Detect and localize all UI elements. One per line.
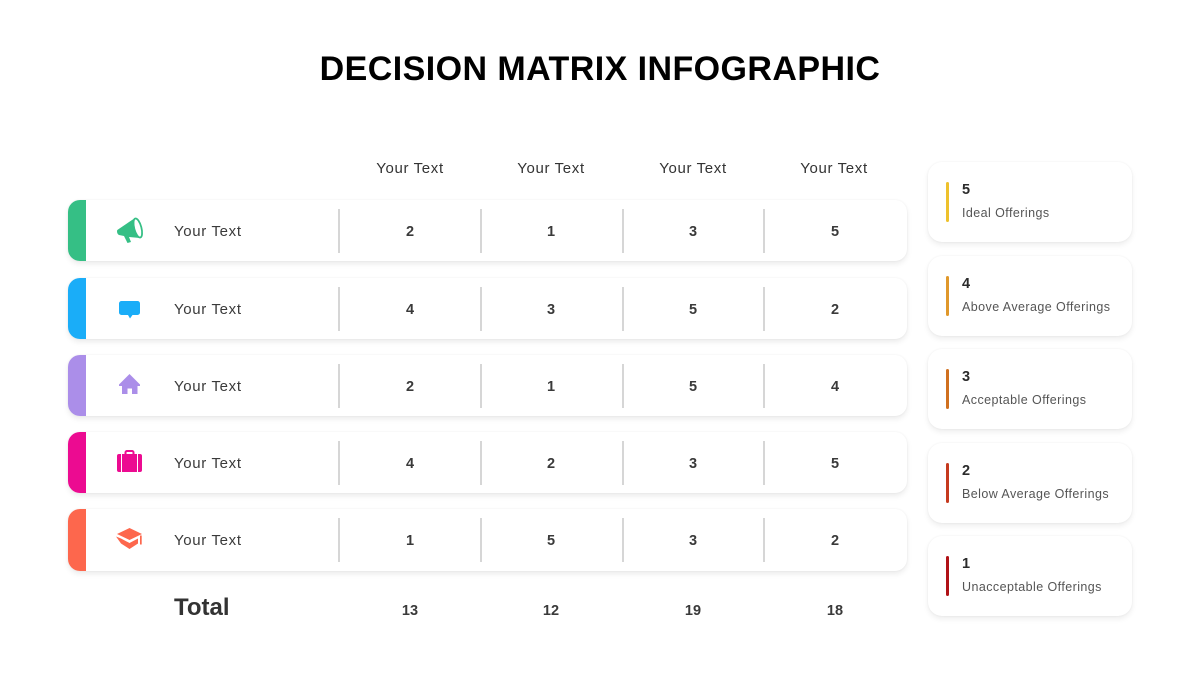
row 4: magenta (68, 432, 907, 493)
value: 5 (547, 533, 555, 549)
row label: Your Text (174, 532, 242, 549)
value: 3 (547, 302, 555, 318)
column heading 3: Your Text (659, 160, 727, 177)
colour bar (946, 182, 949, 222)
total 4: 18 (827, 603, 843, 619)
total 1: 13 (402, 603, 418, 619)
legend card: 5 (928, 162, 1132, 242)
value: 3 (689, 533, 697, 549)
colour bar (946, 276, 949, 316)
legend card: 4 (928, 256, 1132, 336)
row 1: green (68, 200, 907, 261)
row label: Your Text (174, 378, 242, 395)
value: 5 (689, 379, 697, 395)
description: Acceptable Offerings (962, 393, 1086, 407)
value: 4 (831, 379, 839, 395)
colour tab (68, 200, 86, 261)
value: 1 (547, 379, 555, 395)
colour bar (946, 463, 949, 503)
column heading 1: Your Text (376, 160, 444, 177)
value: 3 (689, 224, 697, 240)
colour tab (68, 432, 86, 493)
value: 2 (406, 224, 414, 240)
row label: Your Text (174, 223, 242, 240)
colour tab (68, 355, 86, 416)
total label: Total (174, 594, 230, 621)
legend card: 1 (928, 536, 1132, 616)
value: 1 (406, 533, 414, 549)
score: 3 (962, 369, 970, 385)
value: 5 (689, 302, 697, 318)
value: 4 (406, 302, 414, 318)
value: 2 (547, 456, 555, 472)
column heading 4: Your Text (800, 160, 868, 177)
icon: graduation cap (116, 528, 142, 549)
icon: house (119, 374, 140, 394)
row label: Your Text (174, 455, 242, 472)
score: 1 (962, 556, 970, 572)
value: 3 (689, 456, 697, 472)
row label: Your Text (174, 301, 242, 318)
icon: briefcase (117, 450, 142, 472)
legend card: 3 (928, 349, 1132, 429)
row 5: coral (68, 509, 907, 571)
score: 2 (962, 463, 970, 479)
value: 4 (406, 456, 414, 472)
value: 2 (831, 533, 839, 549)
description: Below Average Offerings (962, 487, 1109, 501)
description: Above Average Offerings (962, 300, 1110, 314)
total 3: 19 (685, 603, 701, 619)
score: 4 (962, 276, 970, 292)
icon: speech bubble (119, 301, 140, 318)
colour bar (946, 369, 949, 409)
value: 1 (547, 224, 555, 240)
icon: megaphone (117, 218, 143, 243)
score: 5 (962, 182, 970, 198)
colour tab (68, 278, 86, 339)
row 3: purple (68, 355, 907, 416)
title: DECISION MATRIX INFOGRAPHIC (320, 50, 880, 88)
row 2: blue (68, 278, 907, 339)
colour tab (68, 509, 86, 571)
value: 2 (406, 379, 414, 395)
column heading 2: Your Text (517, 160, 585, 177)
value: 5 (831, 456, 839, 472)
description: Unacceptable Offerings (962, 580, 1102, 594)
value: 5 (831, 224, 839, 240)
description: Ideal Offerings (962, 206, 1050, 220)
colour bar (946, 556, 949, 596)
value: 2 (831, 302, 839, 318)
total 2: 12 (543, 603, 559, 619)
legend card: 2 (928, 443, 1132, 523)
